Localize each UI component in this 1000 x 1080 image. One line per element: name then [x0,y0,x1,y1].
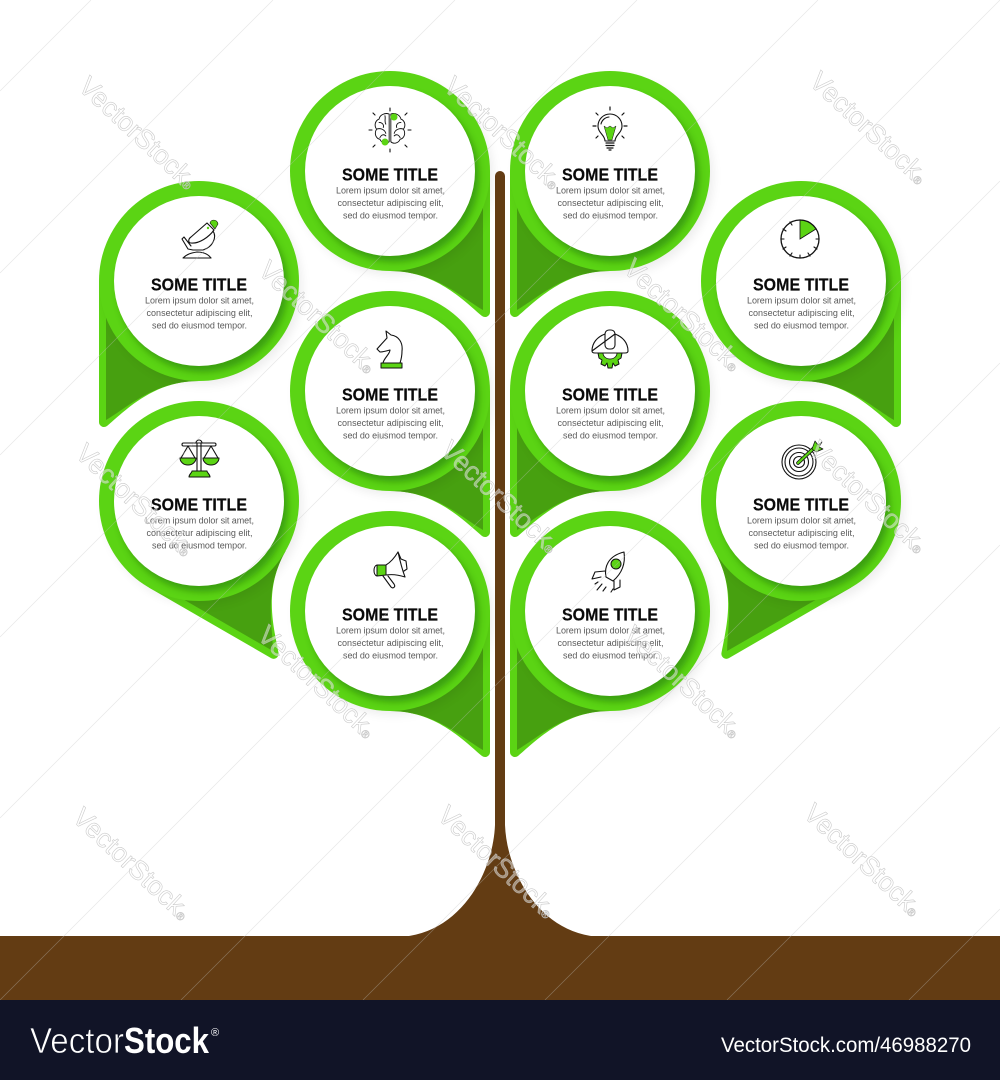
footer logo: Stock [124,1020,210,1061]
icon: chess knight [377,331,402,368]
watermarks: VectorStock® [67,802,197,926]
description: consectetur adipiscing elit, [558,198,664,208]
description: consectetur adipiscing elit, [146,308,252,318]
description [145,516,254,550]
icon: helmet and gear [592,330,628,368]
title: SOME TITLE [342,164,438,184]
description [747,296,856,330]
footer image id: VectorStock.com/46988270 [721,1034,971,1057]
title: SOME TITLE [753,274,849,294]
title: SOME TITLE [562,604,658,624]
description: sed do eiusmod tempor. [152,320,247,330]
description [145,296,254,330]
panel: light bulb [510,71,713,317]
description: Lorem ipsum dolor sit amet, [336,406,445,416]
watermarks: VectorStock® [252,620,382,744]
description: Lorem ipsum dolor sit amet, [336,186,445,196]
icon: brain [369,108,411,152]
icon: microscope [182,220,218,258]
watermarks: VectorStock® [618,620,748,744]
footer logo: Vector [30,1020,124,1061]
panel: rocket [510,511,713,757]
description: Lorem ipsum dolor sit amet, [556,406,665,416]
panel: megaphone [290,511,493,757]
description: consectetur adipiscing elit, [748,528,854,538]
icon: rocket [592,552,624,592]
description [556,406,665,440]
description [747,516,856,550]
title: SOME TITLE [342,384,438,404]
panel: clock [701,181,904,427]
description: Lorem ipsum dolor sit amet, [336,626,445,636]
watermarks: VectorStock® [435,435,565,559]
description [556,186,665,220]
description: Lorem ipsum dolor sit amet, [556,626,665,636]
watermarks: VectorStock® [73,71,203,195]
watermarks: VectorStock® [798,798,928,922]
description: Lorem ipsum dolor sit amet, [747,296,856,306]
watermarks: VectorStock® [432,800,562,924]
description: sed do eiusmod tempor. [563,210,658,220]
description: Lorem ipsum dolor sit amet, [747,516,856,526]
description: consectetur adipiscing elit, [558,638,664,648]
icon: target with arrow [782,441,823,479]
description [336,186,445,220]
watermarks: VectorStock® [803,435,933,559]
description: Lorem ipsum dolor sit amet, [145,516,254,526]
icon: light bulb [593,107,627,150]
panel: scales [99,401,325,661]
watermarks: VectorStock® [253,255,383,379]
ground [0,936,1000,1000]
icon: balance scales [180,440,219,477]
description: sed do eiusmod tempor. [754,540,849,550]
description: consectetur adipiscing elit, [338,198,444,208]
description: sed do eiusmod tempor. [343,650,438,660]
panel: target [675,401,904,661]
description: consectetur adipiscing elit, [338,638,444,648]
watermarks [67,66,934,926]
icon: megaphone [374,552,407,588]
title: SOME TITLE [151,494,247,514]
title: SOME TITLE [151,274,247,294]
watermarks: VectorStock® [618,253,748,377]
description: sed do eiusmod tempor. [754,320,849,330]
watermarks: VectorStock® [438,71,568,195]
description [556,626,665,660]
description: consectetur adipiscing elit, [558,418,664,428]
description: consectetur adipiscing elit, [146,528,252,538]
description: sed do eiusmod tempor. [343,430,438,440]
footer bar [0,1000,1000,1080]
panel: knight [290,291,493,537]
title: SOME TITLE [342,604,438,624]
description: consectetur adipiscing elit, [748,308,854,318]
panel: brain [290,71,493,317]
description [336,626,445,660]
description: sed do eiusmod tempor. [152,540,247,550]
description: Lorem ipsum dolor sit amet, [556,186,665,196]
tree trunk [397,171,603,937]
description: consectetur adipiscing elit, [338,418,444,428]
panel: helmet [510,291,713,537]
panel: microscope [99,181,302,427]
title: SOME TITLE [562,164,658,184]
title: SOME TITLE [562,384,658,404]
footer logo [30,1020,219,1061]
description [336,406,445,440]
title: SOME TITLE [753,494,849,514]
watermarks: VectorStock® [70,438,200,562]
watermarks: VectorStock® [804,66,934,190]
footer logo: ® [211,1027,219,1039]
description: sed do eiusmod tempor. [563,650,658,660]
description: sed do eiusmod tempor. [343,210,438,220]
description: sed do eiusmod tempor. [563,430,658,440]
description: Lorem ipsum dolor sit amet, [145,296,254,306]
icon: clock [781,220,819,258]
